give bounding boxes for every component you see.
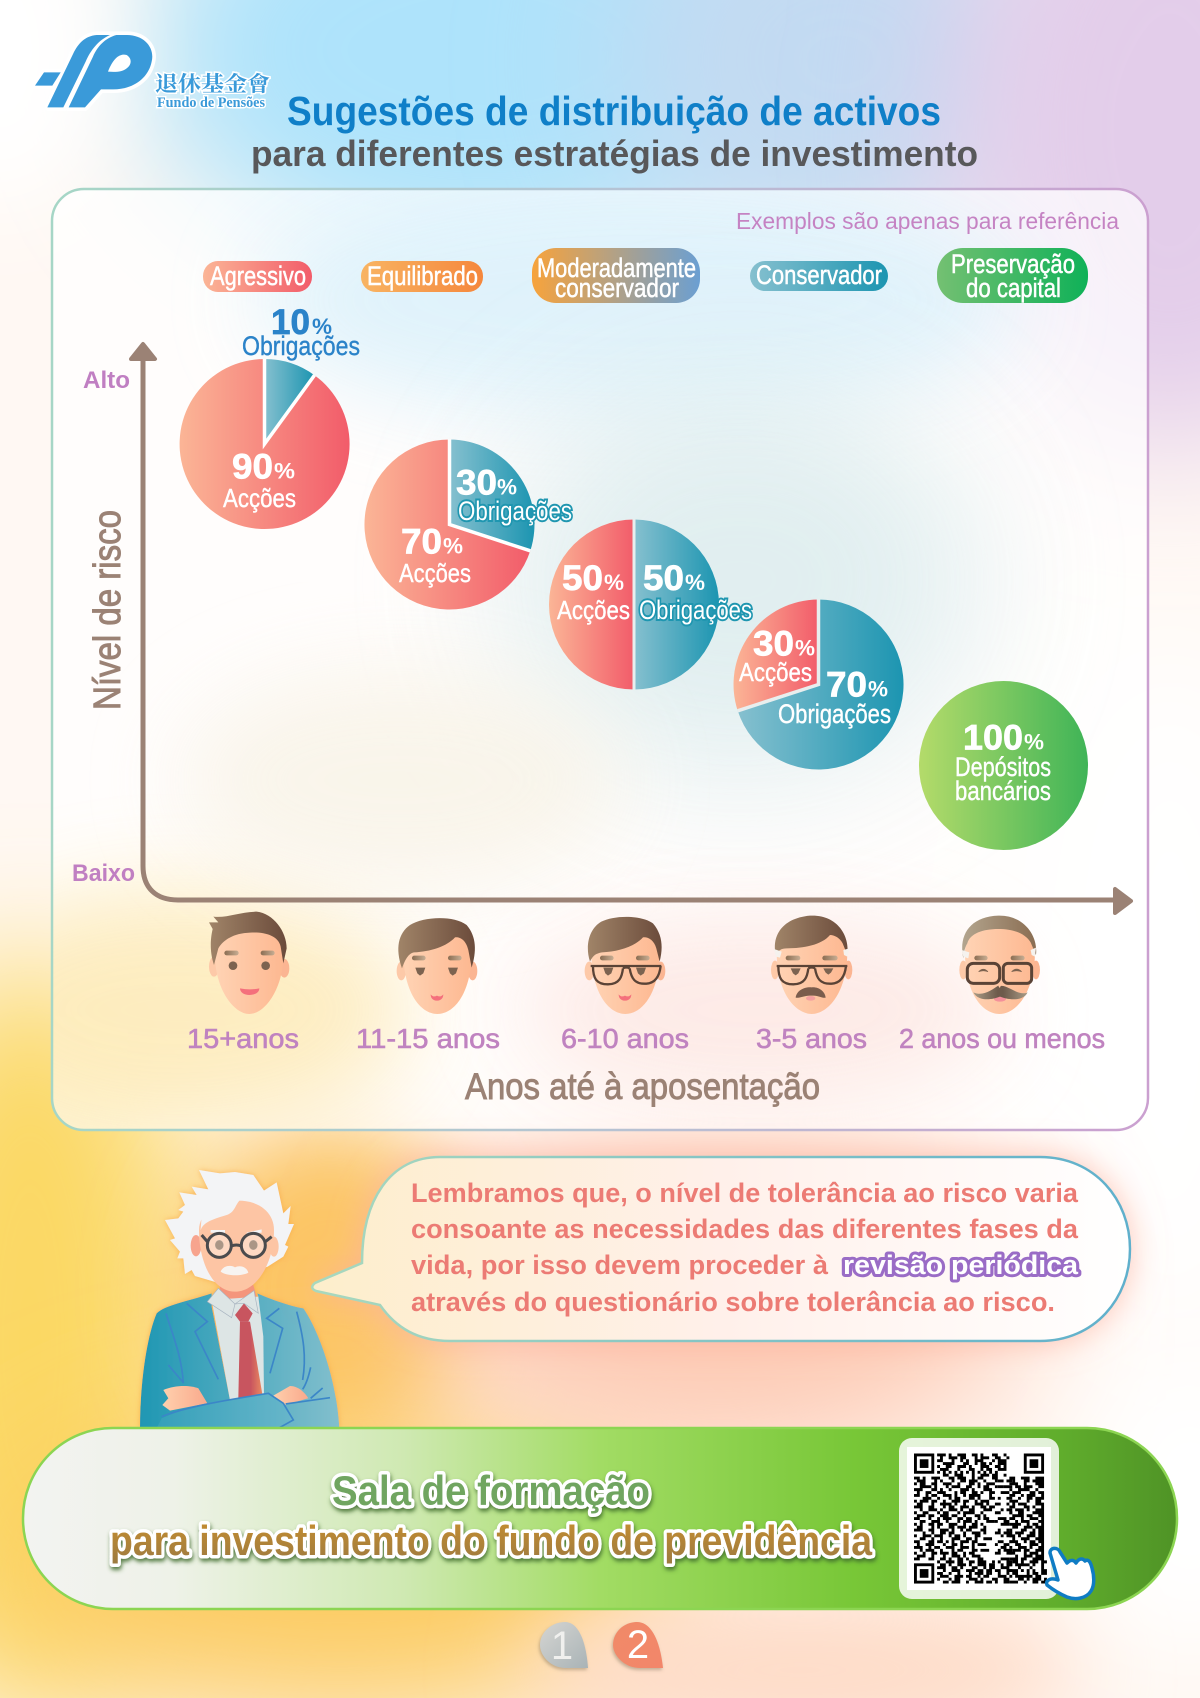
pie: conservative 30/70: Acções [739,657,812,687]
legend: strategy pills: do capital [966,273,1061,303]
pie: balanced 70/30: % [497,474,517,500]
axis labels: years until retirement: 6-10 anos [561,1023,689,1054]
title: Sugestões de distribuição de activos [287,88,941,134]
axes: risk and time arrows [131,344,1131,913]
pie: aggressive 90/10: % [274,458,295,484]
reminder text [411,1178,1079,1317]
icon: face 3-5 years [771,916,852,1014]
page marker: 1 [540,1622,588,1668]
axis labels: years until retirement: 11-15 anos [356,1023,500,1054]
axis labels: years until retirement [187,1023,1105,1054]
title [251,88,978,174]
pie: aggressive 90/10 [180,303,360,529]
pie: moderately conservative 50/50 [549,520,752,690]
axis label: risk level [72,367,135,887]
banner heading: Sala de formação [332,1467,650,1514]
pie: aggressive 90/10: Acções [223,483,296,513]
icon: face 11-15 years [397,918,477,1014]
axis label: risk level: Baixo [72,860,135,887]
pie: balanced 70/30: 30 [456,464,497,502]
page marker: 1: 1 [551,1624,573,1668]
legend: strategy pills: conservador [555,273,679,303]
pie: aggressive 90/10: Obrigações [242,331,360,361]
pie: moderately conservative 50/50: % [685,570,705,595]
pie: balanced 70/30: Acções [399,558,471,588]
pie: balanced 70/30: % [443,534,463,558]
logo: Fundo de Pensões: 退休基金會 [155,68,270,98]
pie: conservative 30/70: Obrigações [778,699,891,729]
pie: aggressive 90/10: 90 [232,448,273,486]
pie: moderately conservative 50/50: % [604,570,624,595]
character: advisor [140,1170,339,1428]
pie: moderately conservative 50/50: Acções [557,595,630,625]
disclaimer note: Exemplos são apenas para referência [736,208,1119,234]
pie: moderately conservative 50/50: Obrigações [639,595,752,625]
legend: strategy pills: Agressivo [210,261,306,291]
pie: conservative 30/70: 70 [826,666,867,704]
QR code [899,1438,1059,1599]
legend: strategy pills: Conservador [756,260,882,290]
pie: aggressive 90/10: 10 [271,303,310,342]
axis title: years to retirement: Anos até à aposentação [465,1066,820,1107]
reminder text: vida, por isso devem proceder à [411,1250,829,1280]
icon: pointing hand [1047,1548,1094,1599]
logo: Fundo de Pensões: Fundo de Pensões [157,95,265,111]
pie: conservative 30/70: % [795,636,815,660]
pie: conservative 30/70 [734,599,904,770]
axis label: risk level: Nível de risco [87,510,129,710]
reminder text: revisão periódica [843,1250,1079,1280]
legend: strategy pills: Preservação [951,249,1075,279]
pie: capital preservation 100: 100 [963,718,1023,758]
axis labels: years until retirement: 2 anos ou menos [899,1023,1105,1054]
pie: balanced 70/30: 70 [401,522,442,562]
panel: risk chart [0,180,1148,1130]
legend: strategy pills: Equilibrado [367,261,478,291]
pie: capital preservation 100: % [1024,730,1044,754]
title: para diferentes estratégias de investimento [251,133,978,174]
legend: strategy pills [203,248,1088,303]
reminder text: através do questionário sobre tolerância ao risco. [411,1287,1055,1317]
pie: moderately conservative 50/50: 50 [643,559,684,598]
pie: capital preservation 100: bancários [955,776,1051,806]
axis labels: years until retirement: 3-5 anos [756,1023,867,1054]
page marker: 2: 2 [627,1623,649,1667]
pie: aggressive 90/10: % [312,314,332,339]
legend: strategy pills: Moderadamente [537,253,696,283]
axis labels: years until retirement: 15+anos [187,1023,299,1054]
speech bubble [312,1157,1130,1341]
icon: face 6-10 years [585,917,665,1014]
banner heading [110,1467,873,1564]
pie: capital preservation 100: Depósitos [955,752,1051,782]
pie: capital preservation 100 [919,681,1088,850]
banner heading: para investimento do fundo de previdência [110,1517,873,1564]
icon: face 15+ years [209,912,289,1014]
pie: conservative 30/70: % [868,676,888,702]
pie: balanced 70/30: Obrigações [458,496,572,526]
reminder text: consoante as necessidades das diferentes fases da [411,1214,1079,1244]
reminder text: Lembramos que, o nível de tolerância ao risco varia [411,1178,1079,1208]
page marker: 2 [613,1622,663,1668]
pie: moderately conservative 50/50: 50 [562,559,603,598]
icon: face 2 years or less [959,916,1040,1014]
pie: balanced 70/30 [364,439,572,610]
logo: Fundo de Pensões [35,35,270,111]
banner: training room [23,1428,1177,1609]
axis label: risk level: Alto [83,367,130,394]
pie: conservative 30/70: 30 [753,624,794,664]
